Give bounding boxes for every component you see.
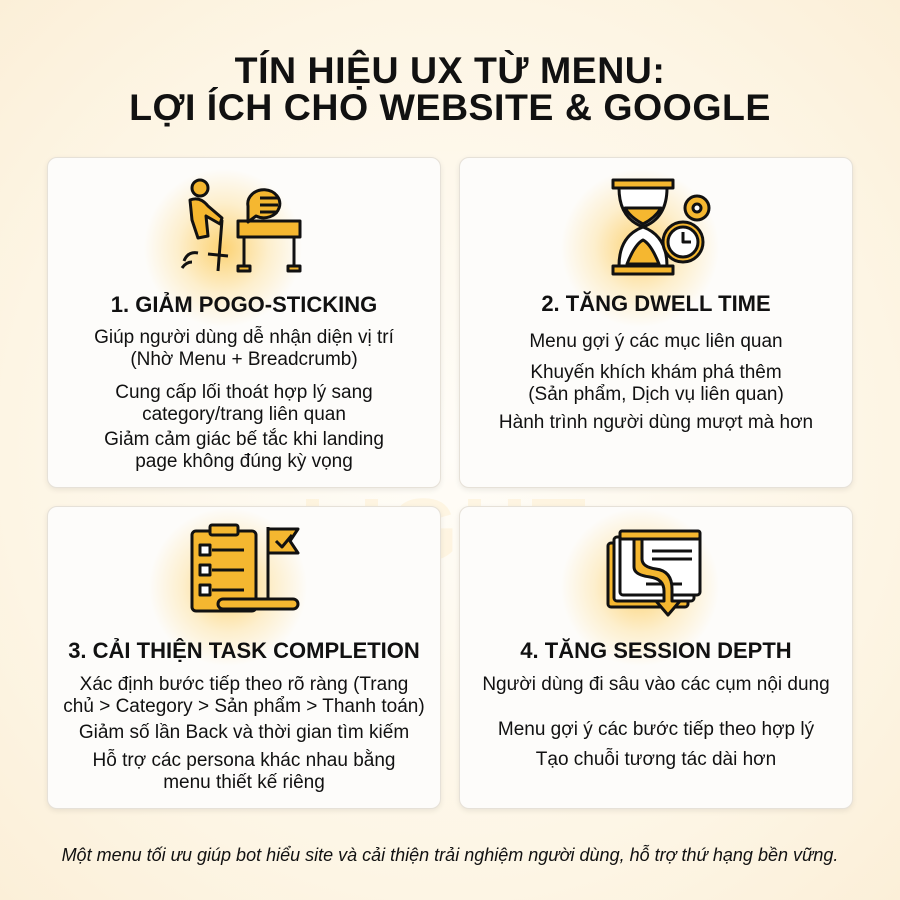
text: [63, 674, 425, 717]
heading: 4. TĂNG SESSION DEPTH: [520, 638, 792, 663]
title: [129, 49, 771, 128]
panel: pogo-sticking: category/trang liên quan: [142, 404, 346, 425]
panel: task completion: Giảm số lần Back và thời gian tìm kiếm: [79, 722, 409, 743]
text: Menu gợi ý các mục liên quan: [529, 331, 783, 352]
panel: dwell time: Hành trình người dùng mượt mà hơn: [499, 412, 813, 433]
text: Xác định bước tiếp theo rõ ràng (Trang: [80, 674, 408, 695]
panel: task completion: Hỗ trợ các persona khác nhau bằng: [93, 750, 395, 771]
panel: pogo-sticking: [47, 157, 441, 488]
panel: session depth: Tạo chuỗi tương tác dài hơn: [536, 749, 776, 770]
panel: pogo-sticking: page không đúng kỳ vọng: [135, 451, 353, 472]
heading: 1. GIẢM POGO-STICKING: [111, 292, 377, 317]
panel: dwell time: (Sản phẩm, Dịch vụ liên quan): [528, 384, 784, 405]
text: Giúp người dùng dễ nhận diện vị trí: [94, 327, 394, 348]
text: chủ > Category > Sản phẩm > Thanh toán): [63, 696, 425, 717]
icon: pogo stick and barrier: [180, 178, 302, 272]
panel: task completion: menu thiết kế riêng: [163, 772, 325, 793]
text: (Nhờ Menu + Breadcrumb): [130, 349, 358, 370]
title: LỢI ÍCH CHO WEBSITE & GOOGLE: [129, 86, 771, 128]
icon: stacked windows with arrow: [606, 530, 702, 617]
panel: dwell time: Khuyến khích khám phá thêm: [530, 362, 782, 383]
text: [94, 326, 394, 370]
panel: session depth: Menu gợi ý các bước tiếp theo hợp lý: [498, 719, 814, 740]
panel: dwell time: [459, 157, 853, 488]
panel: session depth: [459, 506, 853, 809]
heading: 2. TĂNG DWELL TIME: [541, 291, 771, 316]
text: Người dùng đi sâu vào các cụm nội dung: [482, 674, 830, 695]
panel: pogo-sticking: Giảm cảm giác bế tắc khi landing: [104, 429, 384, 450]
panel: pogo-sticking: Cung cấp lối thoát hợp lý sang: [115, 382, 373, 403]
icon: checklist with flag: [190, 524, 300, 612]
heading: 3. CẢI THIỆN TASK COMPLETION: [68, 638, 420, 663]
watermark: LIGHT: [300, 481, 590, 581]
title: TÍN HIỆU UX TỪ MENU:: [235, 49, 665, 91]
footer note: Một menu tối ưu giúp bot hiểu site và cải thiện trải nghiệm người dùng, hỗ trợ thứ hạng bền vững.: [62, 845, 838, 865]
icon: hourglass and clock: [612, 178, 710, 276]
panel: task completion: [47, 506, 441, 809]
